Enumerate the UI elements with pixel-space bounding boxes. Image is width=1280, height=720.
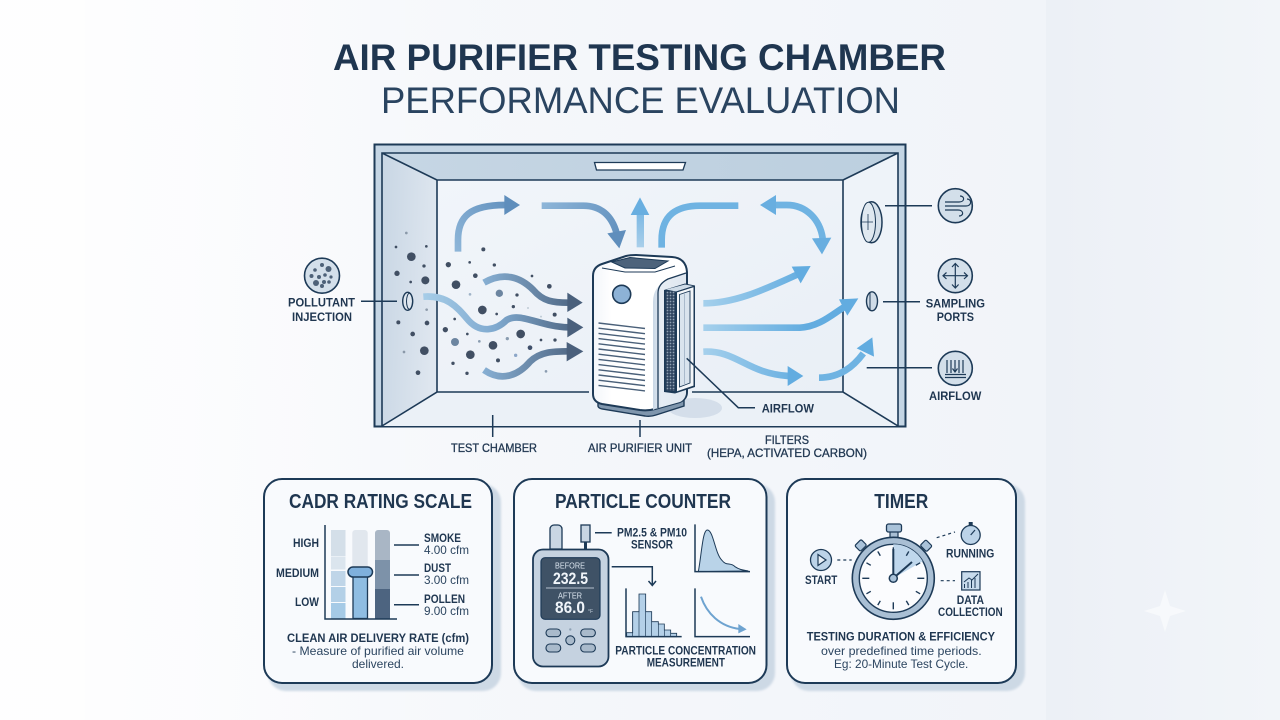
description: CLEAN AIR DELIVERY RATE (cfm) [287,631,469,645]
histogram [626,588,682,637]
large sampling port [861,202,882,243]
icon: handheld counter: 86.0 [555,598,585,617]
caption [615,643,756,670]
caption: PARTICLE CONCENTRATION [615,643,756,657]
values: 4.00 cfm [424,543,469,557]
purifier vents [598,323,645,391]
data collection: COLLECTION [938,605,1003,619]
title [333,37,946,121]
chamber floor [382,392,898,426]
arrows: intake airflow [423,195,649,376]
chamber back wall [437,180,843,392]
purifier filter [664,284,695,394]
start [805,550,852,587]
scale labels [276,536,320,609]
sensor label: PM2.5 & PM10 [617,526,687,540]
description: Eg: 20-Minute Test Cycle. [834,657,968,671]
label: air purifier unit: AIR PURIFIER UNIT [588,441,693,455]
small sampling port [866,292,878,311]
title: AIR PURIFIER TESTING CHAMBER [333,37,946,78]
label: filters: FILTERS [765,433,809,447]
label: sampling ports: SAMPLING [926,297,985,311]
title: PERFORMANCE EVALUATION [381,80,900,121]
values: DUST [424,561,452,575]
icon: handheld counter: °F [588,609,593,615]
panel: timer [787,479,1025,691]
chamber right wall [843,153,898,426]
running: RUNNING [946,547,994,561]
label: pollutant injection [288,258,397,324]
description: - Measure of purified air volume [292,644,464,658]
icon: handheld counter: BEFORE [555,562,585,571]
label: airflow filter leader [687,358,815,416]
icon: wind [885,189,972,223]
purifier dial [613,285,631,303]
values: 3.00 cfm [424,573,469,587]
arrows: clean airflow [662,195,874,386]
label: airflow right: AIRFLOW [929,389,982,403]
air purifier unit [593,255,722,418]
label: sampling ports: PORTS [937,310,974,324]
scale labels: LOW [295,595,320,609]
test chamber [374,144,906,426]
heading: particle counter: PARTICLE COUNTER [555,491,731,513]
sensor label: SENSOR [631,538,673,552]
heading: timer: TIMER [874,491,929,513]
label: filters [707,433,867,460]
description: over predefined time periods. [821,644,982,658]
values: SMOKE [424,531,461,545]
chamber ceiling [382,153,898,180]
data collection: DATA [957,593,984,607]
label: filters: (HEPA, ACTIVATED CARBON) [707,446,867,460]
description [807,630,995,671]
heading: CADR rating scale: CADR RATING SCALE [289,491,472,513]
icon: stopwatch [852,524,934,619]
icon: handheld counter: 232.5 [553,569,588,588]
label: airflow filter leader: AIRFLOW [762,402,815,416]
running [937,522,994,561]
panel: particle counter [514,479,775,691]
icon: handheld counter [533,525,608,666]
scale leaders [394,545,419,605]
label: pollutant injection: INJECTION [292,310,352,324]
bar chart [325,525,397,619]
label: pollutant injection: POLLUTANT [288,296,356,310]
pollutant injection port [403,292,413,310]
label: sampling ports [883,259,985,324]
label: test chamber: TEST CHAMBER [451,441,537,455]
description [287,631,469,671]
purifier side panel [653,273,686,410]
chamber left wall [382,153,437,426]
particle curve chart [695,524,750,572]
values [424,531,469,618]
icon: handheld counter: AFTER [558,592,582,601]
decay curve chart [695,588,750,637]
description: TESTING DURATION & EFFICIENCY [807,630,995,644]
particles [394,232,557,375]
start: START [805,573,838,587]
purifier top grille [612,258,668,268]
sensor label [595,526,687,552]
description: delivered. [352,657,404,671]
values: POLLEN [424,592,465,606]
panel: CADR rating scale [264,479,501,691]
scale labels: HIGH [293,536,319,550]
label: test chamber [451,415,537,455]
connector arrow [612,567,656,586]
caption: MEASUREMENT [647,656,726,670]
label: airflow right [867,351,982,403]
data collection [938,572,1003,619]
label: air purifier unit [588,420,693,455]
values: 9.00 cfm [424,604,469,618]
chamber edges [382,153,898,426]
scale labels: MEDIUM [276,566,319,580]
ceiling light [594,162,686,170]
